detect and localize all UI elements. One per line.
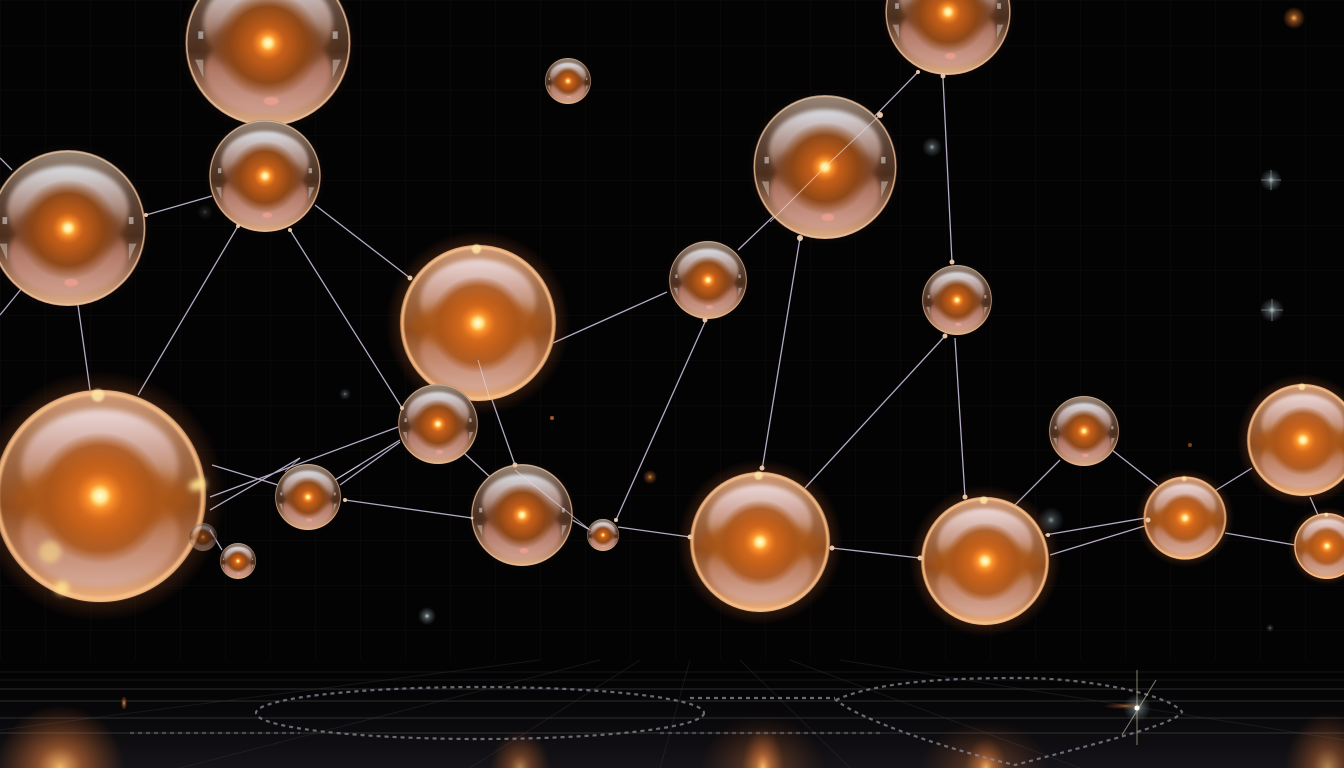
bubble: lower left small [272,461,344,533]
bubble: small satellite [219,542,257,580]
bubble: lower centre [467,460,577,570]
lines crossing over bubbles [285,115,880,530]
bubble: lower right medium [1136,469,1234,567]
bubble: tiny satellite [188,522,218,552]
bubble: lower centre large [677,459,843,625]
connection lines [0,72,1318,558]
bubble: top left large [178,0,358,133]
bubble: biggest lower left [0,371,225,621]
floor sparkle [1103,670,1156,745]
bubble: right edge large [1237,374,1344,506]
hot glints on biggest bubble [39,478,206,595]
bubble: right edge lower [1288,507,1344,585]
bubble: lower right large [909,485,1061,637]
floor reflections [0,705,1344,768]
bubble: centre large [386,231,570,415]
bubble: upper centre right [747,89,903,245]
bubble: centre medium [666,238,750,322]
bubble: mid left [395,381,481,467]
floor grid [0,660,1344,768]
bubble: left edge [0,144,152,312]
floor dashed rings [130,678,1182,765]
bubble: upper left medium [205,116,325,236]
bubble: top centre right [880,0,1016,80]
bubble: right small [1046,393,1122,469]
bubble: small top [543,56,593,106]
line end nodes [144,70,1150,560]
bubble: tiny lower centre [586,518,620,552]
bubble: right medium [919,262,995,338]
